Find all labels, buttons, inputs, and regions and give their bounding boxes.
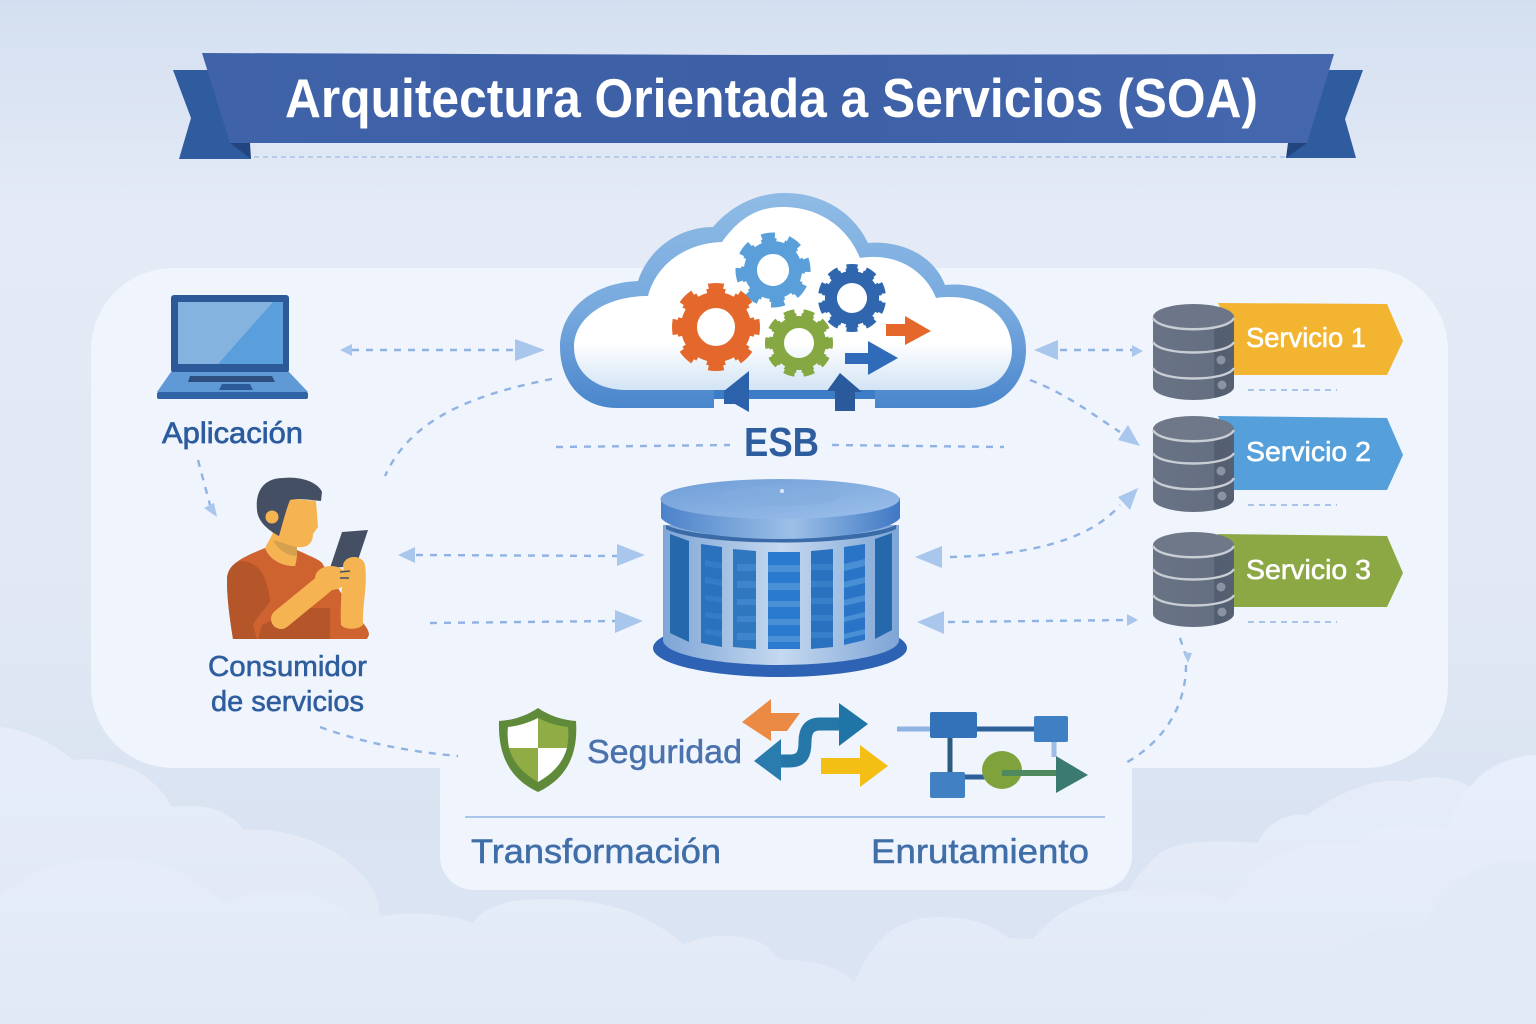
gear: orange bbox=[675, 286, 757, 368]
face bbox=[268, 498, 318, 547]
title text: Arquitectura Orientada a Servicios (SOA) bbox=[285, 67, 1258, 129]
icon: security shield bbox=[499, 708, 576, 792]
lower panel: capabilities bbox=[440, 690, 1132, 890]
icon: transformation arrows bbox=[742, 699, 888, 787]
sleeve bbox=[227, 561, 270, 639]
database icon 3 bbox=[1153, 532, 1234, 627]
banner right tail bbox=[1286, 70, 1363, 158]
cloud interior bbox=[574, 207, 1012, 390]
label: Aplicación: Aplicación bbox=[162, 417, 303, 450]
service 2 bbox=[1153, 416, 1403, 512]
arrow: orange right bbox=[886, 316, 931, 345]
service 1 bbox=[1153, 303, 1403, 400]
label: Transformación: Transformación bbox=[471, 833, 721, 871]
service 3 bbox=[1153, 532, 1403, 627]
hands bbox=[315, 566, 347, 590]
gear: light blue bbox=[734, 231, 812, 309]
ribbon: Servicio 2 bbox=[1218, 416, 1403, 490]
barrel lid rim bbox=[661, 498, 900, 539]
barrel windows bbox=[670, 533, 892, 649]
arrow: blue right bbox=[845, 341, 898, 375]
barrel lid top bbox=[660, 479, 900, 519]
icon: ESB cloud with gears bbox=[560, 193, 1026, 412]
label: Seguridad: Seguridad bbox=[587, 733, 742, 770]
forearm right bbox=[341, 565, 366, 629]
database icon 2 bbox=[1153, 416, 1234, 512]
phone bbox=[330, 530, 368, 568]
icon: ESB server barrel bbox=[653, 479, 907, 677]
arrow: left bbox=[724, 371, 749, 412]
dashed connectors bbox=[198, 350, 1337, 765]
icon: laptop bbox=[157, 295, 308, 399]
text: Servicio 1: Servicio 1 bbox=[1246, 322, 1366, 353]
barrel base bbox=[653, 619, 907, 677]
divider line bbox=[465, 816, 1105, 818]
banner left tail bbox=[173, 70, 251, 159]
background clouds bbox=[0, 727, 1536, 1024]
icon: person with phone bbox=[227, 478, 369, 639]
text: Servicio 2: Servicio 2 bbox=[1246, 436, 1371, 467]
gear: dark blue bbox=[812, 258, 892, 338]
label: Enrutamiento: Enrutamiento bbox=[871, 833, 1089, 871]
text: Servicio 3: Servicio 3 bbox=[1246, 554, 1371, 585]
ribbon: Servicio 1 bbox=[1218, 303, 1403, 375]
arrow: orange left bbox=[742, 699, 800, 741]
database icon 1 bbox=[1153, 304, 1234, 400]
icon: routing diagram bbox=[897, 712, 1088, 798]
title banner bbox=[173, 53, 1363, 159]
barrel body bbox=[663, 525, 899, 665]
label: ESB: ESB bbox=[744, 419, 819, 465]
connector arrowheads bbox=[204, 339, 1192, 663]
arrow: teal S bbox=[778, 724, 842, 761]
label: Consumidor de servicios: de servicios bbox=[211, 686, 364, 718]
hair bbox=[257, 478, 322, 536]
banner body bbox=[202, 53, 1334, 143]
label: Consumidor de servicios: Consumidor bbox=[208, 651, 367, 683]
cloud outline bbox=[560, 193, 1026, 408]
gear: green bbox=[768, 312, 830, 374]
ribbon: Servicio 3 bbox=[1218, 534, 1403, 607]
forearm left bbox=[281, 583, 325, 619]
arrow: yellow right bbox=[821, 745, 888, 787]
main panel bbox=[91, 268, 1448, 768]
shirt bbox=[227, 548, 369, 639]
arrow: up bbox=[827, 373, 862, 411]
label: Consumidor de servicios bbox=[208, 651, 367, 718]
barrel window stripes bbox=[705, 559, 865, 642]
